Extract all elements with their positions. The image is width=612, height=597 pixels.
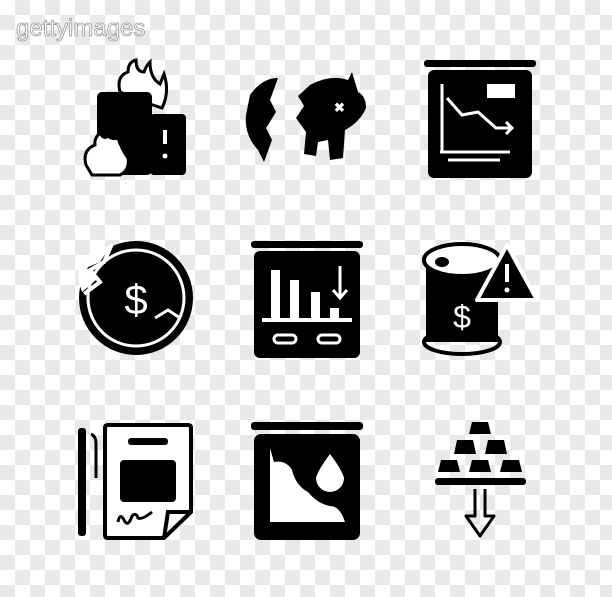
icon: presentation board declining chart: [424, 60, 536, 178]
icon: oil barrel with warning: [424, 244, 537, 354]
icon: broken piggy bank: ✖: [334, 100, 345, 115]
icon: broken piggy bank: [246, 72, 366, 162]
icon: broken dollar coin: $: [124, 276, 148, 323]
icon: broken dollar coin: [78, 241, 193, 355]
icon: board with oil drop falling chart: [251, 422, 363, 540]
watermark: gettyimages: [16, 15, 145, 42]
icon: oil barrel with warning: $: [453, 299, 471, 335]
icon: burning buildings: [85, 60, 186, 175]
icon: pen and signed document: [78, 425, 191, 538]
icon: gold bars with down arrow: [435, 422, 526, 536]
icon: board with bar chart down: [251, 241, 363, 358]
